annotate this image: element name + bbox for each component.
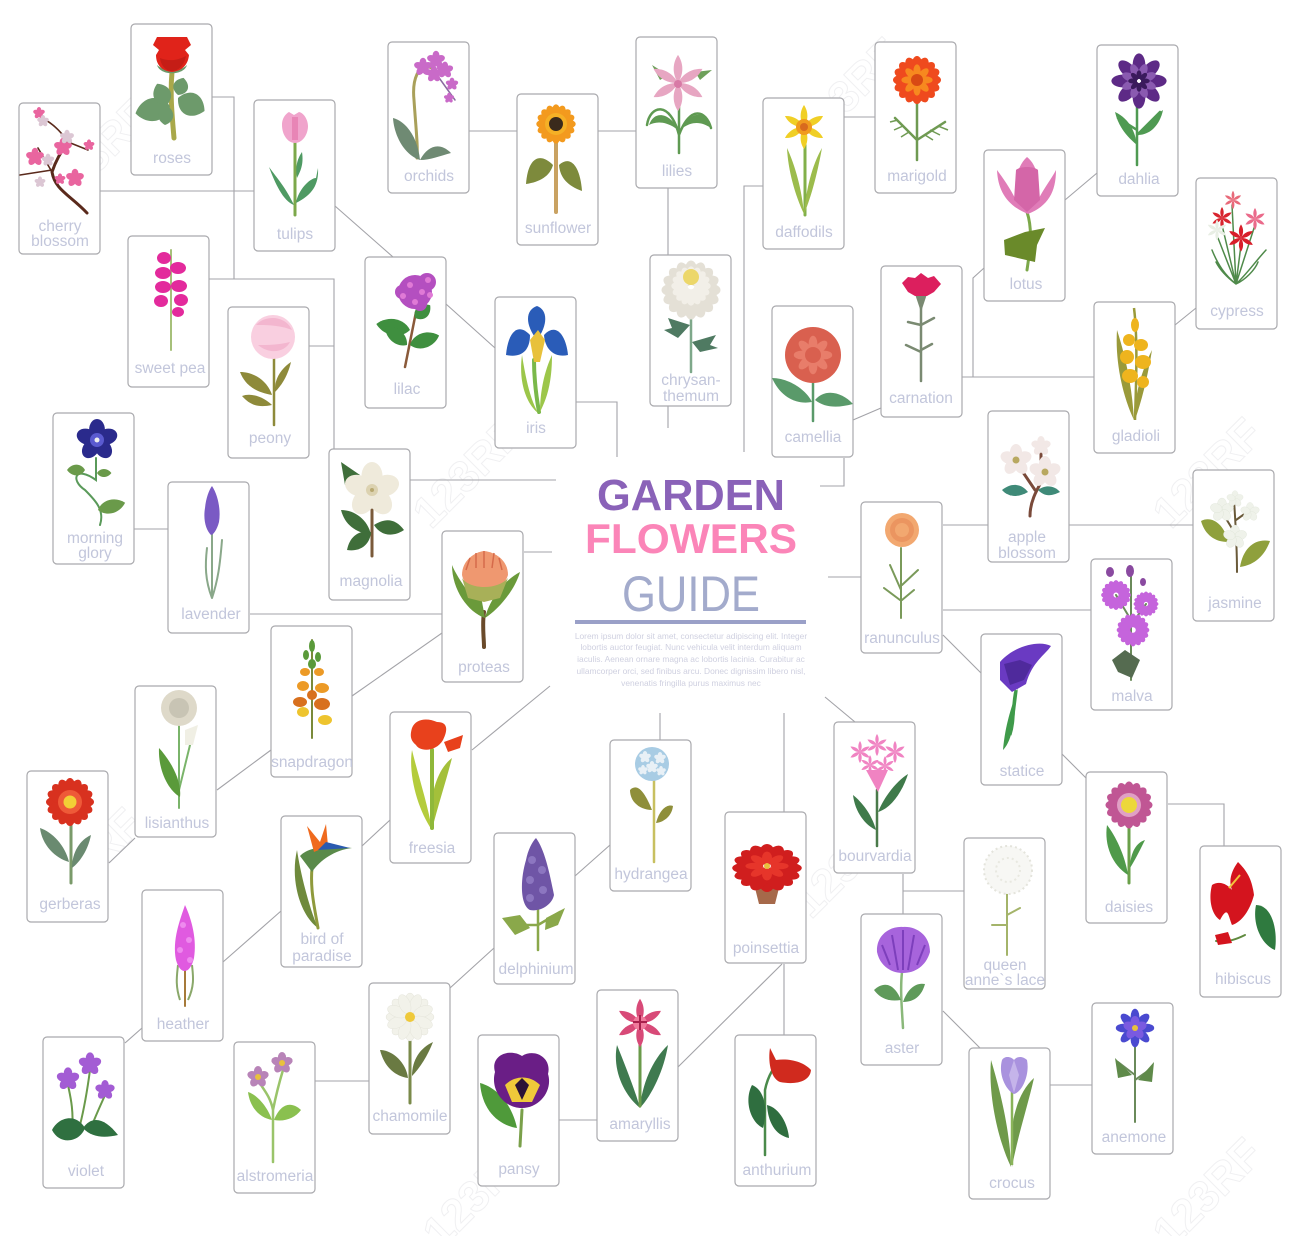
icon: lilac bbox=[375, 273, 441, 367]
icon: alstromeria bbox=[246, 1052, 301, 1162]
icon: iris bbox=[506, 306, 568, 413]
card: gerberas bbox=[27, 771, 108, 922]
label: magnolia: magnolia bbox=[340, 573, 403, 590]
label: amaryllis: amaryllis bbox=[609, 1116, 671, 1133]
label: sunflower: sunflower bbox=[525, 220, 591, 237]
card: daffodils bbox=[763, 98, 844, 249]
icon: anthurium bbox=[748, 1048, 811, 1155]
icon: malva bbox=[1097, 565, 1162, 680]
icon: daisy bbox=[1098, 774, 1160, 883]
title block bbox=[575, 471, 807, 688]
heading: guide: GUIDE bbox=[622, 566, 760, 622]
label: alstromeria: alstromeria bbox=[237, 1168, 314, 1185]
label: chrysanthemum: chrysan- bbox=[661, 372, 721, 389]
label: orchids: orchids bbox=[404, 168, 454, 185]
intro paragraph: iaculis. Aenean ornare magna ac lobortis lacinia. Curabitur ac bbox=[577, 654, 805, 664]
label: anemone: anemone bbox=[1102, 1129, 1166, 1146]
label: lisianthus: lisianthus bbox=[145, 815, 210, 832]
card: sunflower bbox=[517, 94, 598, 245]
text: 123RF bbox=[784, 799, 912, 927]
icon: hibiscus bbox=[1210, 862, 1276, 950]
label: queen anne's lace: anne`s lace bbox=[965, 972, 1045, 989]
intro paragraph: Lorem ipsum dolor sit amet, consectetur adipiscing elit. Integer bbox=[575, 631, 807, 641]
label: lilies: lilies bbox=[662, 163, 692, 180]
heading: garden: GARDEN bbox=[597, 471, 785, 520]
intro paragraph: venenatis fringilla purus maximus nec bbox=[621, 678, 761, 688]
label: camellia: camellia bbox=[785, 429, 842, 446]
text: 123RF bbox=[24, 799, 152, 927]
icon: camellia bbox=[772, 327, 853, 421]
heading: flowers: FLOWERS bbox=[585, 515, 797, 562]
card: apple blossom bbox=[988, 411, 1069, 562]
card: anthurium bbox=[735, 1035, 816, 1186]
card: daisies bbox=[1086, 772, 1167, 923]
card: jasmine bbox=[1193, 470, 1274, 621]
intro paragraph: lobortis auctor feugiat. Nunc vehicula velit interdum aliquam bbox=[580, 642, 802, 652]
label: cherry blossom: cherry bbox=[38, 218, 82, 235]
icon: morning glory bbox=[67, 419, 127, 525]
label: delphinium: delphinium bbox=[499, 961, 573, 978]
label: violet: violet bbox=[68, 1163, 105, 1180]
label: roses: roses bbox=[153, 150, 191, 167]
icon: anemone bbox=[1115, 1009, 1154, 1122]
card: statice bbox=[981, 634, 1062, 785]
text: 123RF bbox=[1144, 409, 1272, 537]
icon: heather bbox=[175, 905, 195, 1006]
label: peony: peony bbox=[249, 430, 291, 447]
label: chrysanthemum: themum bbox=[663, 388, 719, 405]
icon: poinsettia bbox=[722, 837, 812, 904]
card: gladioli bbox=[1094, 302, 1175, 453]
card: proteas bbox=[442, 531, 523, 682]
label: pansy: pansy bbox=[498, 1161, 540, 1178]
icon: chrysanthemum bbox=[652, 251, 730, 372]
label: cherry blossom: blossom bbox=[31, 233, 89, 250]
card: roses bbox=[131, 24, 212, 175]
icon: statice bbox=[1000, 644, 1051, 750]
icon: pansy bbox=[480, 1053, 549, 1146]
icon: snapdragon bbox=[293, 640, 332, 738]
icon: lotus bbox=[997, 157, 1056, 270]
icon: orchid bbox=[393, 51, 459, 160]
label: anthurium: anthurium bbox=[743, 1162, 811, 1179]
card: queen anne's lace bbox=[964, 838, 1045, 989]
label: snapdragon: snapdragon bbox=[271, 754, 353, 771]
card: anemone bbox=[1092, 1003, 1173, 1154]
card: delphinium bbox=[494, 833, 575, 984]
icon: lily bbox=[647, 55, 712, 153]
connector lines bbox=[100, 97, 1224, 1120]
card: bird of paradise bbox=[281, 816, 362, 967]
icon: lavender bbox=[204, 486, 222, 598]
icon: gladioli bbox=[1117, 308, 1152, 420]
icon: queen anne's lace bbox=[984, 846, 1032, 955]
label: crocus: crocus bbox=[989, 1175, 1035, 1192]
card: lisianthus bbox=[135, 686, 216, 837]
card: lotus bbox=[984, 150, 1065, 301]
icon: cherry blossom bbox=[20, 107, 95, 213]
label: apple blossom: blossom bbox=[998, 545, 1056, 562]
icon: daffodil bbox=[783, 105, 825, 215]
label: queen anne's lace: queen bbox=[983, 957, 1027, 974]
card: heather bbox=[142, 890, 223, 1041]
card: alstromeria bbox=[234, 1042, 315, 1193]
icon: sunflower bbox=[526, 98, 582, 212]
text: 123RF bbox=[404, 409, 532, 537]
card: malva bbox=[1091, 559, 1172, 710]
icon: marigold bbox=[886, 49, 948, 160]
card: carnation bbox=[881, 266, 962, 417]
label: statice: statice bbox=[1000, 763, 1044, 780]
label: iris: iris bbox=[526, 420, 546, 437]
label: gladioli: gladioli bbox=[1112, 428, 1160, 445]
card: pansy bbox=[478, 1035, 559, 1186]
label: heather: heather bbox=[157, 1016, 209, 1033]
label: apple blossom: apple bbox=[1008, 529, 1046, 546]
label: bourvardia: bourvardia bbox=[838, 848, 912, 865]
card: orchids bbox=[388, 42, 469, 193]
card: magnolia bbox=[329, 449, 410, 600]
card: chrysanthemum bbox=[650, 251, 731, 406]
label: bird of paradise: bird of bbox=[300, 931, 344, 948]
card: dahlia bbox=[1097, 45, 1178, 196]
icon: crocus bbox=[990, 1057, 1034, 1167]
text: 123RF bbox=[34, 89, 162, 217]
icon: magnolia bbox=[341, 462, 404, 556]
label: poinsettia: poinsettia bbox=[733, 940, 800, 957]
label: chamomile: chamomile bbox=[373, 1108, 447, 1125]
card: crocus bbox=[969, 1048, 1050, 1199]
label: freesia: freesia bbox=[409, 840, 456, 857]
icon: protea bbox=[452, 551, 520, 647]
label: morning glory: glory bbox=[78, 545, 112, 562]
card: sweet pea bbox=[128, 236, 209, 387]
icon: gerbera bbox=[39, 771, 101, 883]
label: daffodils: daffodils bbox=[775, 224, 833, 241]
icon: apple blossom bbox=[999, 436, 1062, 516]
card: bourvardia bbox=[834, 722, 915, 873]
icon: sweet pea bbox=[154, 250, 188, 350]
card: lilies bbox=[636, 37, 717, 188]
card: hydrangea bbox=[610, 740, 691, 891]
icon: carnation bbox=[902, 273, 941, 381]
card: freesia bbox=[390, 712, 471, 863]
icon: aster bbox=[874, 927, 930, 1028]
label: lavender: lavender bbox=[181, 606, 241, 623]
icon: cypress bbox=[1207, 191, 1266, 284]
icon: violet bbox=[52, 1052, 118, 1140]
card: camellia bbox=[772, 306, 853, 457]
icon: rose bbox=[133, 37, 210, 138]
icon: peony bbox=[240, 315, 295, 425]
icon: hydrangea bbox=[630, 747, 673, 862]
card: snapdragon bbox=[271, 626, 353, 777]
label: dahlia: dahlia bbox=[1118, 171, 1160, 188]
icon: amaryllis bbox=[616, 999, 668, 1108]
card: tulips bbox=[254, 100, 335, 251]
label: malva: malva bbox=[1111, 688, 1153, 705]
card: morning glory bbox=[53, 413, 134, 564]
label: marigold: marigold bbox=[887, 168, 947, 185]
label: carnation: carnation bbox=[889, 390, 953, 407]
card: peony bbox=[228, 307, 309, 458]
icon: jasmine bbox=[1201, 491, 1270, 572]
card: aster bbox=[861, 914, 942, 1065]
icon: lisianthus bbox=[159, 690, 198, 808]
label: cypress: cypress bbox=[1210, 303, 1264, 320]
label: tulips: tulips bbox=[277, 226, 313, 243]
icon: tulip bbox=[269, 112, 318, 215]
label: aster: aster bbox=[885, 1040, 919, 1057]
label: jasmine: jasmine bbox=[1207, 595, 1262, 612]
label: gerberas: gerberas bbox=[39, 896, 101, 913]
card: cypress bbox=[1196, 178, 1277, 329]
label: bird of paradise: paradise bbox=[292, 948, 352, 965]
card: amaryllis bbox=[597, 990, 678, 1141]
label: lilac: lilac bbox=[394, 381, 421, 398]
icon: freesia bbox=[411, 720, 463, 830]
label: daisies: daisies bbox=[1105, 899, 1153, 916]
intro paragraph: ullamcorper orci, sed finibus arcu. Donec dignissim libero nisl, bbox=[576, 666, 806, 676]
card: lilac bbox=[365, 257, 446, 408]
icon: bird of paradise bbox=[295, 824, 352, 928]
card: lavender bbox=[168, 482, 249, 633]
text: 123RF bbox=[784, 29, 912, 157]
card: chamomile bbox=[369, 983, 450, 1134]
label: hydrangea: hydrangea bbox=[614, 866, 688, 883]
label: proteas: proteas bbox=[458, 659, 510, 676]
card: cherry blossom bbox=[19, 103, 100, 254]
icon: bourvardia bbox=[850, 734, 908, 846]
label: morning glory: morning bbox=[67, 530, 123, 547]
icon: chamomile bbox=[379, 986, 441, 1103]
label: hibiscus: hibiscus bbox=[1215, 971, 1271, 988]
card: violet bbox=[43, 1037, 124, 1188]
label: lotus: lotus bbox=[1010, 276, 1043, 293]
title rule bbox=[575, 620, 806, 624]
card: poinsettia bbox=[722, 812, 812, 963]
card: iris bbox=[495, 297, 576, 448]
card: hibiscus bbox=[1200, 846, 1281, 997]
icon: delphinium bbox=[502, 838, 565, 950]
card: ranunculus bbox=[861, 502, 942, 653]
card: marigold bbox=[875, 42, 956, 193]
label: sweet pea: sweet pea bbox=[135, 360, 206, 377]
icon: dahlia bbox=[1111, 53, 1167, 165]
label: ranunculus: ranunculus bbox=[864, 630, 940, 647]
icon: ranunculus bbox=[884, 513, 919, 618]
